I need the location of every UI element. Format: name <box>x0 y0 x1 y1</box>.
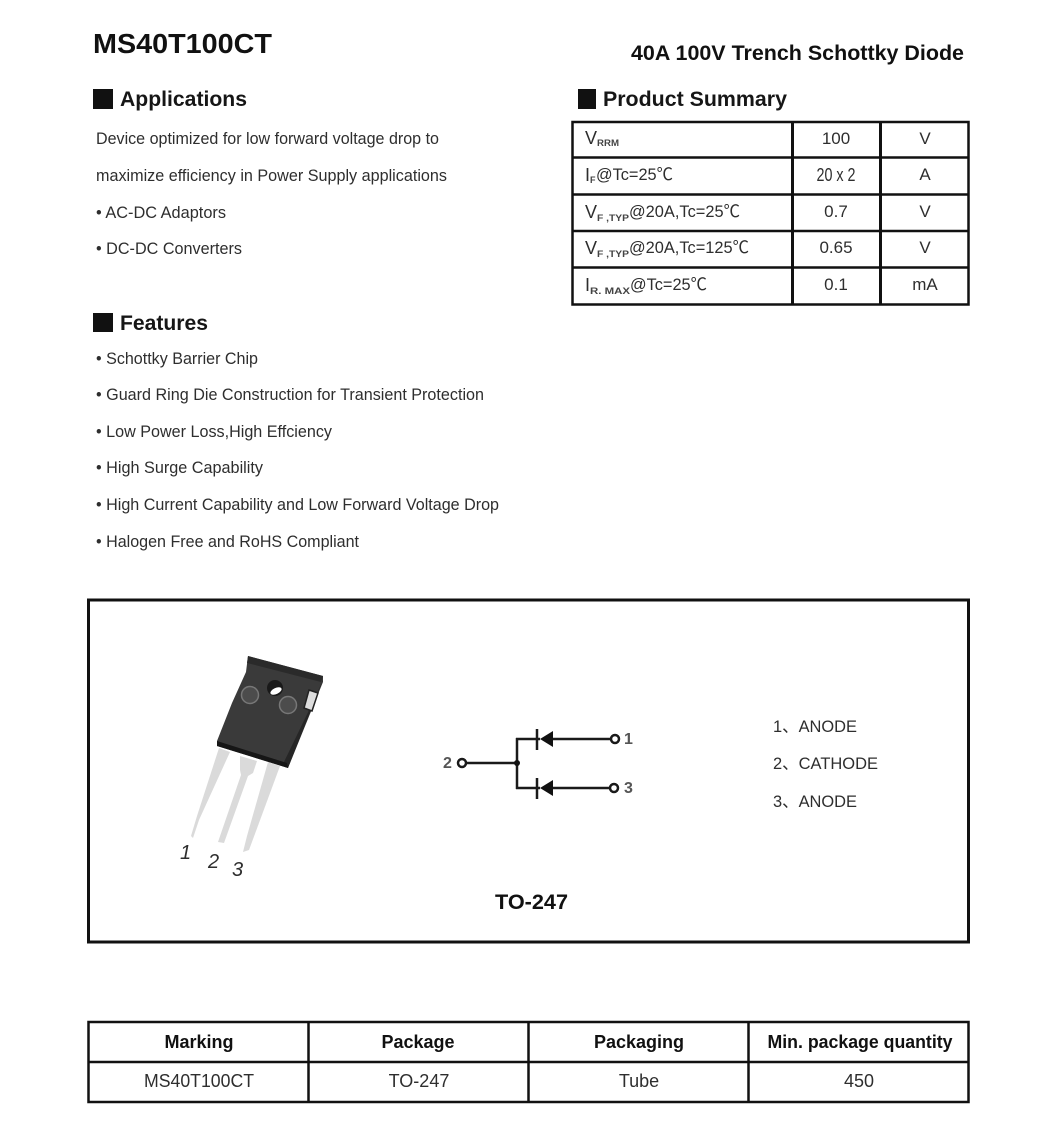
row: IF: @Tc=25℃ <box>596 165 673 184</box>
row: VF typ 25C: F ,TYP <box>597 213 630 224</box>
heading: features: Features <box>120 312 208 335</box>
row: VF typ 125C <box>585 238 931 260</box>
row: VF typ 25C: V <box>585 202 597 222</box>
row: IF: F <box>590 175 596 185</box>
row: VF typ 25C <box>585 202 931 224</box>
row: VRRM: V <box>919 129 931 148</box>
heading: applications: Applications <box>120 88 247 111</box>
table: product summary <box>572 122 968 304</box>
table header: Package <box>381 1032 455 1052</box>
icon: TO-247 component <box>180 656 323 881</box>
schematic: dual common cathode diode <box>443 729 633 799</box>
text block: applications list: maximize efficiency in Power Supply applications <box>96 166 447 185</box>
pin legend <box>773 717 878 811</box>
text block: features list: • Low Power Loss,High Effciency <box>96 422 332 441</box>
text block: features list: • High Current Capability and Low Forward Voltage Drop <box>96 495 499 514</box>
table header <box>164 1032 952 1052</box>
pin labels: 3 <box>232 859 243 881</box>
table header: Packaging <box>594 1032 684 1052</box>
title: part number: MS40T100CT <box>93 28 272 59</box>
row: VF typ 25C: @20A,Tc=25℃ <box>629 202 740 221</box>
table row: MS40T100CT <box>144 1071 254 1091</box>
text block: features list: • High Surge Capability <box>96 458 263 477</box>
text block: applications list: Device optimized for low forward voltage drop to <box>96 129 439 148</box>
text block: applications list <box>96 129 447 258</box>
pin labels: 2 <box>207 851 219 873</box>
table: ordering information <box>88 1022 968 1102</box>
table row: TO-247 <box>389 1071 449 1091</box>
schematic: dual common cathode diode: 1 <box>624 731 633 748</box>
heading: product summary: Product Summary <box>603 88 787 111</box>
text block: applications list: • AC-DC Adaptors <box>96 203 226 222</box>
row: IF: I <box>585 165 590 185</box>
panel: features <box>93 312 499 551</box>
subtitle: device description: 40A 100V Trench Schottky Diode <box>631 42 964 65</box>
row: IR max: R. MAX <box>590 286 631 297</box>
schematic: dual common cathode diode: 2 <box>443 755 452 772</box>
row: VF typ 125C: @20A,Tc=125℃ <box>629 238 749 257</box>
row: VRRM: V <box>585 128 597 148</box>
pin legend: 3、ANODE <box>773 792 857 811</box>
package label: TO-247 <box>495 891 568 914</box>
row: IF: 20 x 2 <box>816 165 856 185</box>
table row <box>144 1071 874 1091</box>
schematic: dual common cathode diode: 3 <box>624 780 633 797</box>
panel: applications <box>93 88 447 258</box>
pin legend: 2、CATHODE <box>773 754 878 773</box>
panel: package <box>88 600 968 942</box>
panel: product summary <box>572 88 968 304</box>
row: VRRM: 100 <box>822 129 850 148</box>
row: IR max <box>585 275 938 297</box>
row: IR max: mA <box>912 275 938 294</box>
pin labels: 1 <box>180 842 191 864</box>
row: VF typ 125C: V <box>585 238 597 258</box>
row: VF typ 125C: 0.65 <box>819 238 853 257</box>
row: VF typ 25C: V <box>919 202 931 221</box>
pin legend: 1、ANODE <box>773 717 857 736</box>
table header: Marking <box>164 1032 234 1052</box>
row: IF: A <box>919 165 931 184</box>
row: VF typ 125C: V <box>919 238 931 257</box>
row: IR max: 0.1 <box>824 275 848 294</box>
package frame <box>88 600 968 942</box>
table row: Tube <box>619 1071 659 1091</box>
text block: features list: • Halogen Free and RoHS Compliant <box>96 532 359 551</box>
row: VRRM <box>585 128 931 149</box>
row: VF typ 25C: 0.7 <box>824 202 848 221</box>
table header: Min. package quantity <box>768 1032 952 1052</box>
text block: features list: • Guard Ring Die Construction for Transient Protection <box>96 385 484 404</box>
pin labels <box>180 842 243 881</box>
table row: 450 <box>844 1071 874 1091</box>
text block: applications list: • DC-DC Converters <box>96 239 242 258</box>
text block: features list: • Schottky Barrier Chip <box>96 349 258 368</box>
row: IR max: @Tc=25℃ <box>630 275 707 294</box>
row: VRRM: RRM <box>597 138 619 149</box>
body <box>217 656 323 768</box>
text block: features list <box>96 349 499 551</box>
row: IR max: I <box>585 275 590 295</box>
row: IF <box>585 165 931 185</box>
leads <box>191 748 280 852</box>
row: VF typ 125C: F ,TYP <box>597 249 630 260</box>
